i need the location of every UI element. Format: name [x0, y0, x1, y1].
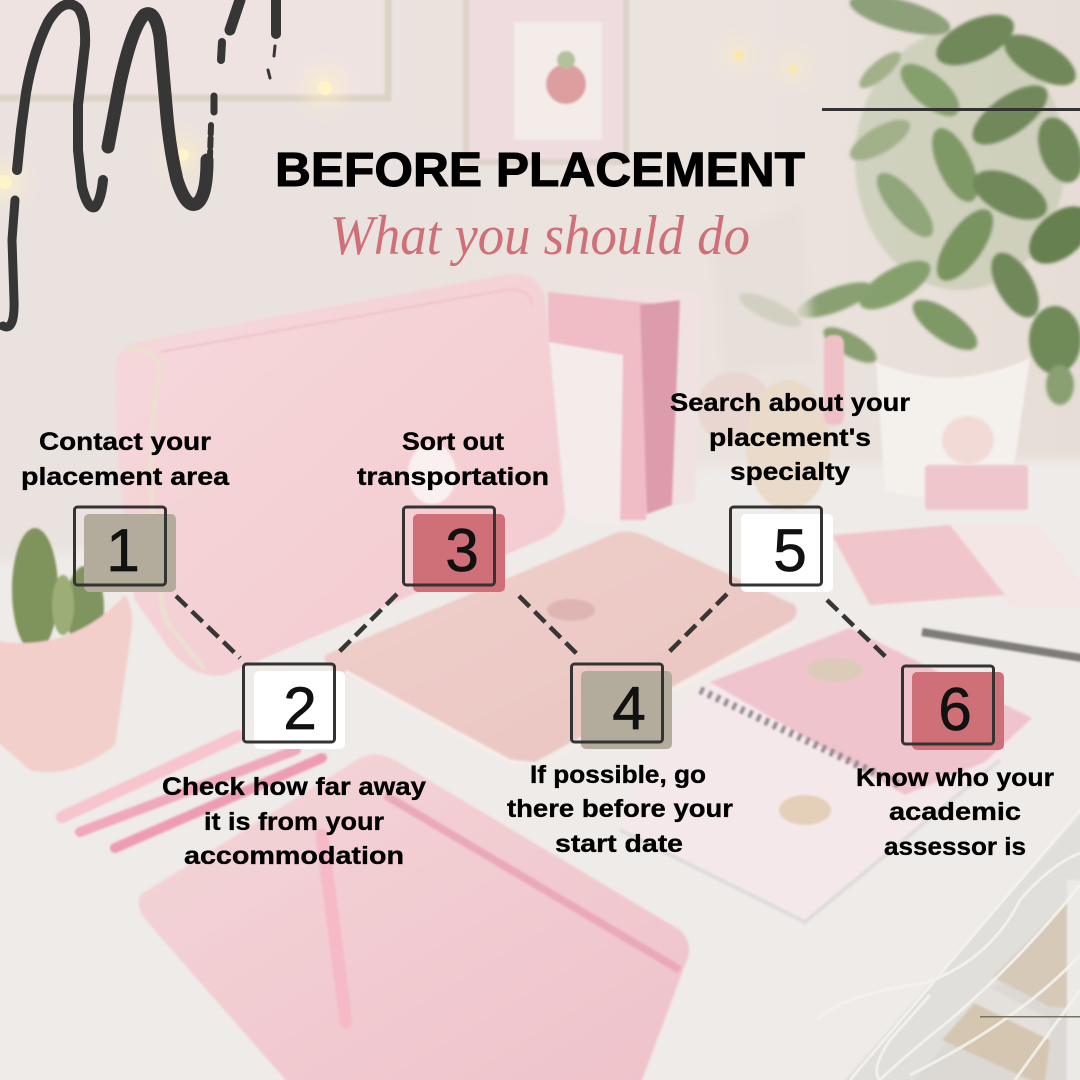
step 6 text: assessor is [884, 833, 1026, 861]
step 4 [507, 664, 733, 858]
cactus pot [0, 528, 132, 772]
step 1 number box [74, 507, 176, 592]
step 1 text: Contact your [39, 428, 211, 456]
decorative rule top-right [822, 108, 1080, 111]
jar [712, 205, 815, 375]
step 2 text: accommodation [184, 842, 404, 870]
plant stems and leaves right [735, 0, 1080, 405]
basket and trinkets [697, 335, 1028, 510]
step 2 number box: 2 [283, 675, 317, 742]
step 1 text: placement area [21, 463, 230, 491]
step 2 text: Check how far away [162, 773, 426, 801]
decorative white swirl lines bottom-right [817, 810, 1080, 1080]
step 5 text: placement's [709, 424, 871, 452]
step 5 text [670, 389, 910, 486]
stack of books [548, 285, 702, 525]
step 5 number box [730, 507, 833, 592]
dashed connector lines [176, 594, 889, 660]
pink pens [62, 736, 322, 848]
desk surface [0, 458, 1080, 1080]
step 1 text [21, 428, 230, 491]
pink notebook with pen [139, 754, 689, 1080]
pink laptop bag [115, 274, 565, 676]
step 5 [670, 389, 910, 592]
step 5 text: specialty [730, 458, 850, 486]
step 3 text: Sort out [402, 428, 505, 456]
step 5 number box: 5 [773, 517, 807, 584]
step 3 text: transportation [357, 463, 549, 491]
step 6 text [856, 764, 1054, 861]
step 5 text: Search about your [670, 389, 910, 417]
step 3 number box [404, 507, 505, 592]
subtitle: What you should do [330, 205, 750, 267]
plant pot [876, 358, 1030, 498]
string lights [0, 45, 803, 197]
step 6 text: Know who your [856, 764, 1054, 792]
wall frame left [0, 0, 388, 98]
step 2 number box [244, 664, 345, 749]
step 4 text [507, 761, 733, 858]
step 6 text: academic [889, 798, 1021, 826]
step 3 number box: 3 [445, 517, 479, 584]
step 1 number box: 1 [106, 517, 140, 584]
step 6 number box: 6 [938, 676, 972, 743]
cards and pen right [832, 525, 1080, 658]
step 1 [21, 428, 230, 592]
step 4 text: there before your [507, 795, 733, 823]
laptop [324, 532, 797, 765]
step 4 text: start date [555, 830, 683, 858]
wall frame centre [466, 0, 626, 162]
decorative rule bottom-right [980, 1016, 1080, 1018]
spiral notebook [620, 628, 1032, 922]
decorative brush squiggle top-left [3, 0, 276, 327]
step 2 text [162, 773, 426, 870]
step 4 number box [572, 664, 672, 749]
step 3 text [357, 428, 549, 491]
step 6 [856, 666, 1054, 861]
floor corner beyond desk [843, 812, 1080, 1080]
step 3 [357, 428, 549, 592]
step 2 text: it is from your [204, 808, 384, 836]
step 4 text: If possible, go [530, 761, 706, 789]
title: BEFORE PLACEMENT [275, 144, 805, 197]
step 2 [162, 664, 426, 870]
step 6 number box [902, 666, 1004, 750]
step 4 number box: 4 [612, 675, 646, 742]
